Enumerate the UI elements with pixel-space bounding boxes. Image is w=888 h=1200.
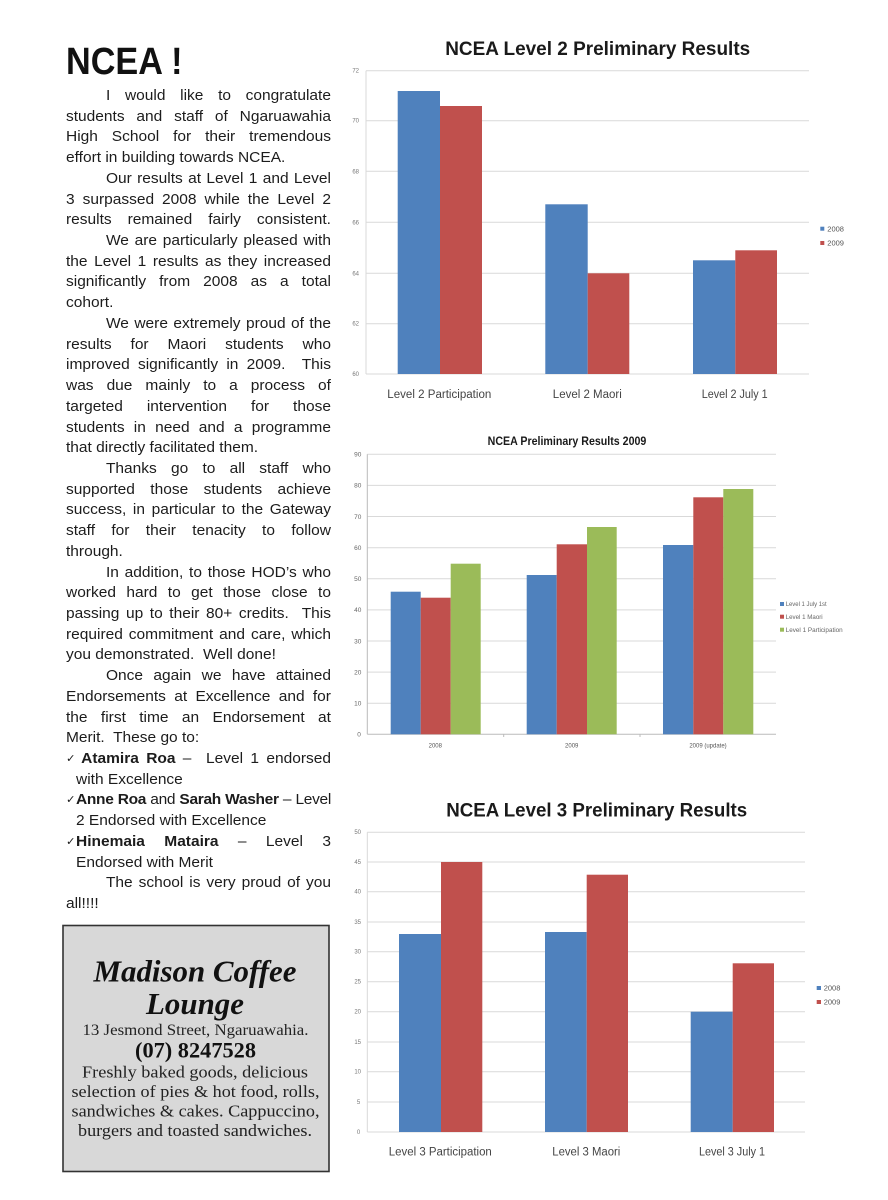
article text: Merit. These go to: <box>66 729 199 746</box>
article text: you demonstrated. Well done! <box>66 646 276 663</box>
y axis labels: 25 <box>354 980 362 986</box>
y axis labels: 66 <box>352 220 360 226</box>
y axis labels: 35 <box>354 920 362 926</box>
article text: results for Maori students who <box>66 336 331 353</box>
advert address: 13 Jesmond Street, Ngaruawahia. <box>82 1022 308 1039</box>
advert: Madison Coffee Lounge: Lounge <box>145 986 244 1021</box>
chart title: Level 3: NCEA Level 3 Preliminary Results <box>446 801 747 822</box>
legend: Level 1 Participation <box>786 628 843 634</box>
article text: Endorsements at Excellence and for <box>66 688 331 705</box>
y axis labels: 50 <box>354 830 362 836</box>
y axis labels: 72 <box>352 69 360 75</box>
y axis labels: 5 <box>357 1100 361 1106</box>
article text: 3 surpassed 2008 while the Level 2 <box>66 191 331 208</box>
y axis labels: 62 <box>352 322 360 328</box>
y axis labels: 0 <box>357 1130 361 1136</box>
article text: The school is very proud of you <box>106 874 331 891</box>
y axis labels: 30 <box>354 950 362 956</box>
legend: 2009 <box>827 239 844 248</box>
article text: supported those students achieve <box>66 481 331 498</box>
article text: ✓ <box>66 835 76 848</box>
article text: We are particularly pleased with <box>106 232 331 249</box>
y axis labels: 90 <box>354 452 362 459</box>
legend <box>817 984 840 1007</box>
article text: was due mainly to a process of <box>66 377 331 394</box>
advert description <box>72 1063 320 1140</box>
y axis labels: 80 <box>354 483 362 490</box>
y axis labels: 40 <box>354 890 362 896</box>
advert description: burgers and toasted sandwiches. <box>78 1121 312 1140</box>
y axis labels: 20 <box>354 1010 362 1016</box>
y axis labels <box>354 830 362 1136</box>
article text: passing up to their 80+ credits. This <box>66 605 331 622</box>
article text: students in need and a programme <box>66 418 331 436</box>
article text: through. <box>66 543 123 560</box>
article text: Hinemaia Mataira – Level 3 <box>76 833 331 850</box>
y axis labels: 30 <box>354 638 362 645</box>
advert panel <box>63 926 329 1172</box>
advert description: selection of pies & hot food, rolls, <box>72 1082 320 1101</box>
advert: Madison Coffee Lounge <box>63 926 329 1172</box>
article text: required commitment and care, which <box>66 626 331 643</box>
article text: cohort. <box>66 294 113 311</box>
article text: High School for their tremendous <box>66 128 331 145</box>
article text: targeted intervention for those <box>66 398 331 415</box>
article text: Atamira Roa – Level 1 endorsed <box>81 750 331 767</box>
y axis labels: 15 <box>354 1040 362 1046</box>
article text: significantly from 2008 as a total <box>66 273 331 290</box>
y axis labels: 0 <box>357 732 361 739</box>
category labels: 2009 <box>565 744 579 750</box>
y axis labels: 10 <box>354 1070 362 1076</box>
article text: Our results at Level 1 and Level <box>106 170 331 187</box>
legend: 2009 <box>824 998 840 1007</box>
category labels: Level 3 July 1 <box>699 1146 765 1158</box>
title: NCEA ! <box>66 41 183 83</box>
article text: the first time an Endorsement at <box>66 709 331 726</box>
bars <box>398 91 777 374</box>
category labels: Level 2 Participation <box>387 389 491 401</box>
y axis labels <box>354 452 362 739</box>
chart title: 2009: NCEA Preliminary Results 2009 <box>488 434 647 448</box>
article text: 2 Endorsed with Excellence <box>76 812 266 829</box>
advert name: Madison Coffee <box>93 954 297 989</box>
y axis labels: 45 <box>354 860 362 866</box>
y axis labels: 68 <box>352 169 360 175</box>
advert phone: (07) 8247528 <box>135 1038 256 1063</box>
category labels: Level 3 Maori <box>552 1146 620 1158</box>
category labels: Level 2 July 1 <box>702 389 768 401</box>
article text: worked hard to get those close to <box>66 584 331 601</box>
advert description: Freshly baked goods, delicious <box>82 1063 308 1082</box>
article text: the Level 1 results as they increased <box>66 253 331 270</box>
legend: 2008 <box>827 224 844 233</box>
y axis labels: 60 <box>354 545 362 552</box>
category labels <box>389 1146 765 1158</box>
chart: NCEA Level 2 Preliminary Results <box>352 39 844 401</box>
chart title: Level 2: NCEA Level 2 Preliminary Results <box>445 39 750 60</box>
category labels: 2008 <box>429 744 443 750</box>
article text: improved significantly in 2009. This <box>66 356 331 373</box>
y axis labels: 50 <box>354 576 362 583</box>
category labels <box>387 389 768 401</box>
y axis labels: 10 <box>354 700 362 708</box>
legend: 2008 <box>824 984 840 993</box>
y axis labels <box>352 69 360 378</box>
category labels: Level 3 Participation <box>389 1146 492 1158</box>
category labels: Level 2 Maori <box>553 389 622 401</box>
article text: results remained fairly consistent. <box>66 211 331 228</box>
legend: Level 1 Maori <box>786 615 823 621</box>
article text: In addition, to those HOD’s who <box>106 564 331 581</box>
y axis labels: 64 <box>352 271 360 277</box>
y axis labels: 70 <box>354 514 362 521</box>
y axis labels: 20 <box>354 669 362 676</box>
article text: effort in building towards NCEA. <box>66 149 285 166</box>
chart: NCEA Preliminary Results 2009 <box>354 434 843 750</box>
article text: staff for their tenacity to follow <box>66 522 331 539</box>
article text: students and staff of Ngaruawahia <box>66 108 331 125</box>
article text: Thanks go to all staff who <box>106 460 331 477</box>
article text: with Excellence <box>76 771 183 788</box>
advert description: sandwiches & cakes. Cappuccino, <box>72 1102 320 1121</box>
y axis labels: 60 <box>352 372 360 378</box>
article text: all!!!! <box>66 895 99 912</box>
article text: ✓ <box>66 793 75 806</box>
y axis labels: 40 <box>354 607 362 614</box>
bars <box>391 489 753 734</box>
article text: that directly facilitated them. <box>66 439 258 456</box>
legend: Level 1 July 1st <box>786 602 827 608</box>
chart: NCEA Level 3 Preliminary Results <box>354 801 840 1158</box>
y axis labels: 70 <box>352 119 360 125</box>
legend <box>820 224 844 248</box>
legend <box>780 602 843 634</box>
category labels <box>429 744 727 750</box>
article text: I would like to congratulate <box>106 87 331 104</box>
article text: Endorsed with Merit <box>76 854 213 871</box>
article text: ✓ <box>66 752 76 765</box>
bars <box>399 862 774 1132</box>
article text: We were extremely proud of the <box>106 315 331 332</box>
article text: Once again we have attained <box>106 667 331 684</box>
article text: Anne Roa and Sarah Washer – Level <box>76 791 331 808</box>
article text: success, in particular to the Gateway <box>66 501 331 518</box>
article text <box>66 87 331 912</box>
category labels: 2009 (update) <box>689 744 727 750</box>
